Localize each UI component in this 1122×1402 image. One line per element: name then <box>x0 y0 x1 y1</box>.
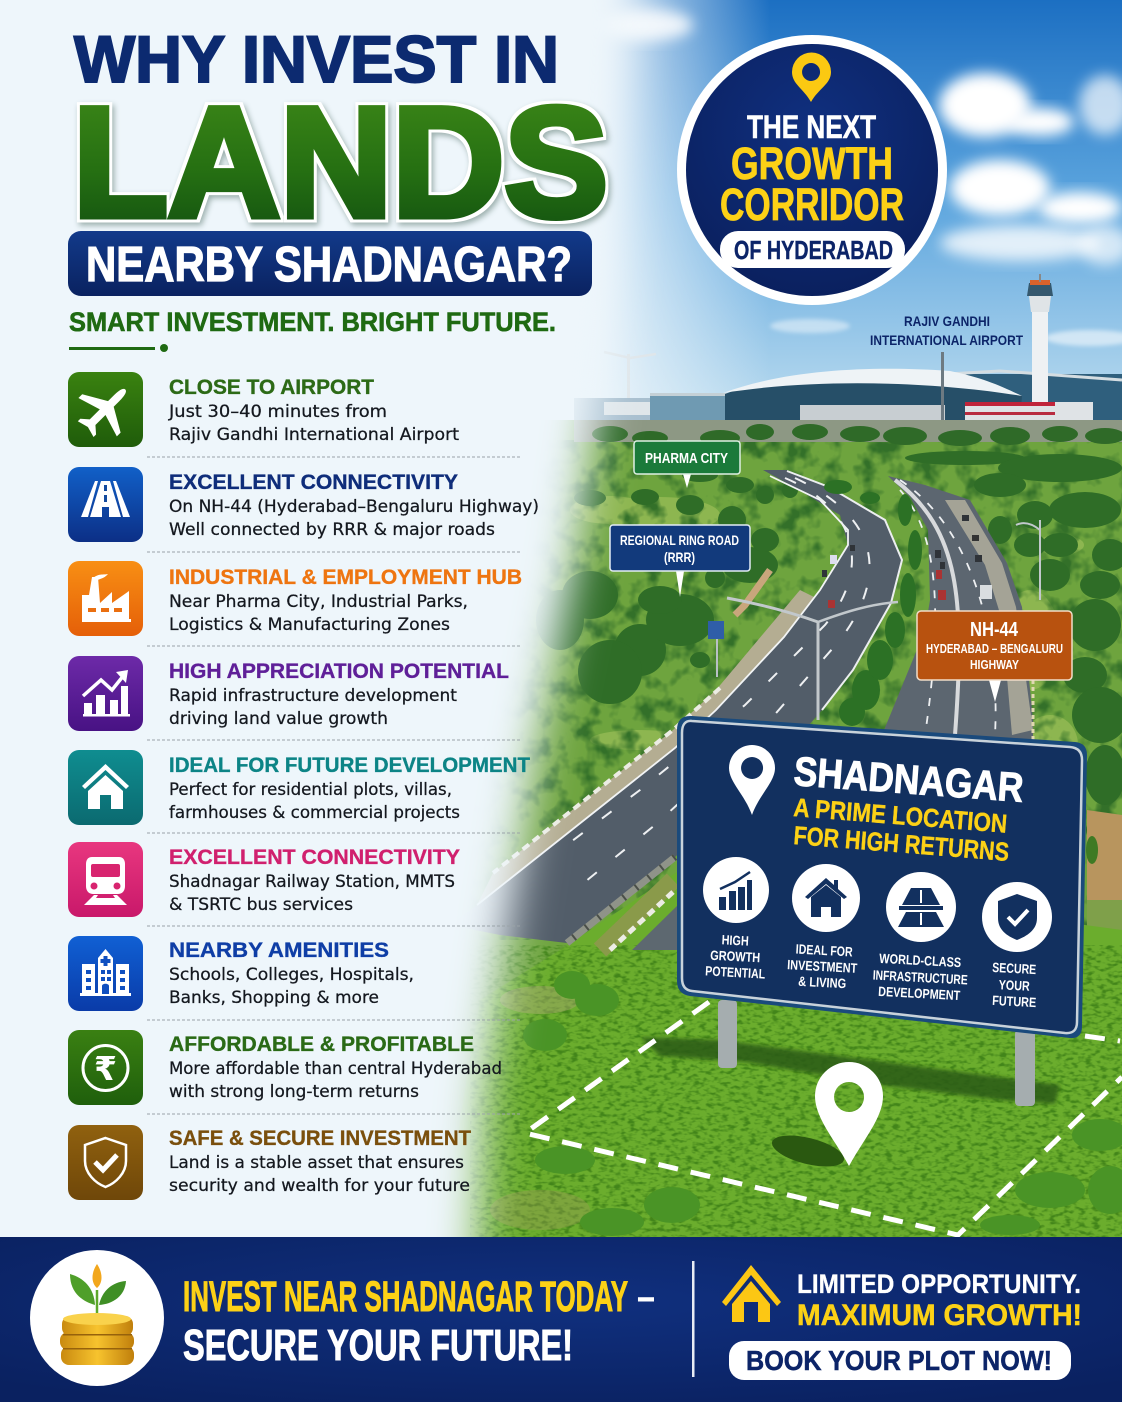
barrier <box>493 688 720 873</box>
panel: shadnagar road sign <box>677 716 1087 1106</box>
badge: next growth corridor: OF HYDERABAD <box>734 235 893 265</box>
panel: shadnagar road sign: SHADNAGAR <box>792 748 1025 811</box>
footer headline: INVEST NEAR SHADNAGAR TODAY <box>183 1273 628 1321</box>
item: rail connectivity: Shadnagar Railway Station, MMTS <box>169 872 455 891</box>
sign feature: investment and living <box>787 864 860 991</box>
footer banner <box>0 1237 1122 1402</box>
dividers <box>147 457 522 1114</box>
footer call to action text: LIMITED OPPORTUNITY. <box>797 1269 1081 1299</box>
callout: regional ring road: (RRR) <box>664 549 695 565</box>
left panel fade <box>0 0 630 1300</box>
item: rail connectivity: EXCELLENT CONNECTIVITY <box>169 845 460 869</box>
icon: rupee: ₹ <box>94 1049 117 1088</box>
icon: ground location pin <box>769 1062 883 1173</box>
dirt path <box>735 570 770 615</box>
cars <box>822 515 992 608</box>
item: appreciation <box>68 656 509 731</box>
sign feature: infrastructure <box>872 872 968 1003</box>
right carriageway <box>880 476 1033 740</box>
footer banner: – <box>637 1273 655 1321</box>
sign feature: secure future: YOUR <box>998 977 1030 994</box>
sign feature: high growth: HIGH <box>721 932 749 949</box>
heading: why invest in: WHY INVEST IN <box>74 22 559 96</box>
item: industrial hub: Logistics & Manufacturing Zones <box>169 615 450 634</box>
icon: yellow pin <box>792 52 831 102</box>
sign posts <box>718 1000 1035 1106</box>
icon: coins and sprout <box>30 1250 164 1386</box>
callout: regional ring road <box>610 525 750 597</box>
callout: nh-44: NH-44 <box>970 619 1019 641</box>
item: rail connectivity: & TSRTC bus services <box>169 895 353 914</box>
callout: pharma city: PHARMA CITY <box>645 450 728 467</box>
item: appreciation: HIGH APPRECIATION POTENTIAL <box>169 659 509 683</box>
item: close to airport <box>66 370 460 448</box>
footer banner: MAXIMUM GROWTH! <box>797 1299 1082 1332</box>
icon: airplane <box>66 370 145 448</box>
item: future development <box>68 750 530 825</box>
grass shrubs <box>523 971 1122 1236</box>
guard rail and side road <box>567 857 675 943</box>
panel: shadnagar road sign: FOR HIGH RETURNS <box>793 820 1010 867</box>
badge: next growth corridor: THE NEXT <box>747 109 876 145</box>
heading: nearby shadnagar pill: NEARBY SHADNAGAR? <box>86 238 572 292</box>
clouds <box>597 9 1122 346</box>
small road sign <box>708 621 724 677</box>
footer banner: SECURE YOUR FUTURE! <box>183 1321 573 1370</box>
sign feature: investment and living: INVESTMENT <box>787 957 858 976</box>
tagline: SMART INVESTMENT. BRIGHT FUTURE. <box>69 307 556 337</box>
callout: nh-44: HYDERABAD – BENGALURU <box>926 641 1063 656</box>
callout: nh-44: HIGHWAY <box>970 657 1019 672</box>
item: safe and secure <box>68 1125 471 1200</box>
sign feature: high growth: POTENTIAL <box>705 963 766 982</box>
badge: next growth corridor: GROWTH <box>731 138 893 189</box>
item: future development: Perfect for residential plots, villas, <box>169 780 452 799</box>
item: affordable <box>68 1030 502 1105</box>
item: close to airport: Rajiv Gandhi International Airport <box>169 425 460 444</box>
sign feature: secure future: SECURE <box>992 960 1037 977</box>
item: amenities <box>68 936 414 1011</box>
item: future development: IDEAL FOR FUTURE DEVELOPMENT <box>169 753 530 777</box>
sign feature: infrastructure: INFRASTRUCTURE <box>872 968 968 987</box>
bare dirt near road <box>500 986 580 1014</box>
item: amenities: Banks, Shopping & more <box>169 988 379 1007</box>
panel: shadnagar road sign: A PRIME LOCATION <box>793 792 1008 839</box>
badge: next growth corridor: CORRIDOR <box>720 179 904 230</box>
road shoulder <box>477 590 820 905</box>
plot boundary <box>525 1002 1122 1235</box>
light grass patches <box>570 496 1084 775</box>
icon: house <box>68 750 143 825</box>
item: safe and secure: SAFE & SECURE INVESTMENT <box>169 1126 471 1150</box>
sign feature: secure future: FUTURE <box>992 993 1037 1010</box>
heading: lands: LANDS <box>73 76 608 250</box>
item: excellent connectivity highway <box>68 467 539 542</box>
airport label <box>870 313 1023 348</box>
sign feature: high growth: GROWTH <box>710 948 761 965</box>
street lamp <box>727 520 1040 720</box>
button: book your plot: BOOK YOUR PLOT NOW! <box>746 1345 1052 1376</box>
icon: growth chart <box>68 656 143 731</box>
sign feature: investment and living: & LIVING <box>798 974 847 991</box>
item: amenities: NEARBY AMENITIES <box>169 938 389 962</box>
item: rail connectivity <box>68 842 460 917</box>
airport building group <box>574 274 1122 442</box>
title <box>68 22 608 296</box>
item: industrial hub: INDUSTRIAL & EMPLOYMENT HUB <box>169 565 522 589</box>
item: affordable: More affordable than central Hyderabad <box>169 1059 502 1078</box>
icon: rupee <box>68 1030 143 1105</box>
main curved road <box>450 470 902 943</box>
item: appreciation: Rapid infrastructure development <box>169 686 458 705</box>
item: excellent connectivity highway: On NH-44 (Hyderabad–Bengaluru Highway) <box>169 497 539 516</box>
icon: yellow house <box>722 1265 781 1322</box>
item: appreciation: driving land value growth <box>169 709 388 728</box>
airport trees <box>592 424 1122 446</box>
item: excellent connectivity highway: Well connected by RRR & major roads <box>169 520 495 539</box>
median bushes <box>824 480 922 726</box>
item: close to airport: Just 30–40 minutes from <box>168 402 387 421</box>
sign feature: infrastructure: DEVELOPMENT <box>878 984 961 1003</box>
callout: regional ring road: REGIONAL RING ROAD <box>620 532 739 548</box>
sign feature: high growth <box>703 857 769 982</box>
icon: white pin <box>729 745 775 815</box>
item: excellent connectivity highway: EXCELLENT CONNECTIVITY <box>169 470 458 494</box>
icon: shield <box>68 1125 143 1200</box>
sign feature: investment and living: IDEAL FOR <box>795 942 853 959</box>
icon: road <box>68 467 143 542</box>
panel: benefit list <box>66 370 539 1200</box>
item: affordable: with strong long-term returns <box>169 1082 419 1101</box>
tree clusters <box>536 451 1122 844</box>
icon: hospital <box>68 936 143 1011</box>
icon: train <box>68 842 143 917</box>
item: close to airport: CLOSE TO AIRPORT <box>169 375 374 399</box>
badge: next growth corridor <box>677 35 947 305</box>
item: future development: farmhouses & commercial projects <box>169 803 460 822</box>
dirt patch <box>1087 810 1122 935</box>
callout: pharma city <box>634 441 740 488</box>
item: industrial hub: Near Pharma City, Industrial Parks, <box>169 592 468 611</box>
ground <box>0 420 1122 1240</box>
sign feature: infrastructure: WORLD-CLASS <box>879 951 962 970</box>
sign feature: secure future <box>982 882 1052 1010</box>
item: amenities: Schools, Colleges, Hospitals, <box>169 965 414 984</box>
item: safe and secure: security and wealth for your future <box>169 1176 470 1195</box>
sign shadow <box>640 1037 1060 1104</box>
item: affordable: AFFORDABLE & PROFITABLE <box>169 1032 474 1056</box>
item: industrial hub <box>68 561 522 636</box>
foreground grass <box>440 870 1122 1240</box>
item: safe and secure: Land is a stable asset that ensures <box>169 1153 464 1172</box>
airport label: RAJIV GANDHI <box>904 313 990 329</box>
lane dashes <box>560 478 852 850</box>
airport label: INTERNATIONAL AIRPORT <box>870 332 1023 348</box>
icon: factory <box>68 561 143 636</box>
callout: nh-44 <box>917 611 1072 702</box>
